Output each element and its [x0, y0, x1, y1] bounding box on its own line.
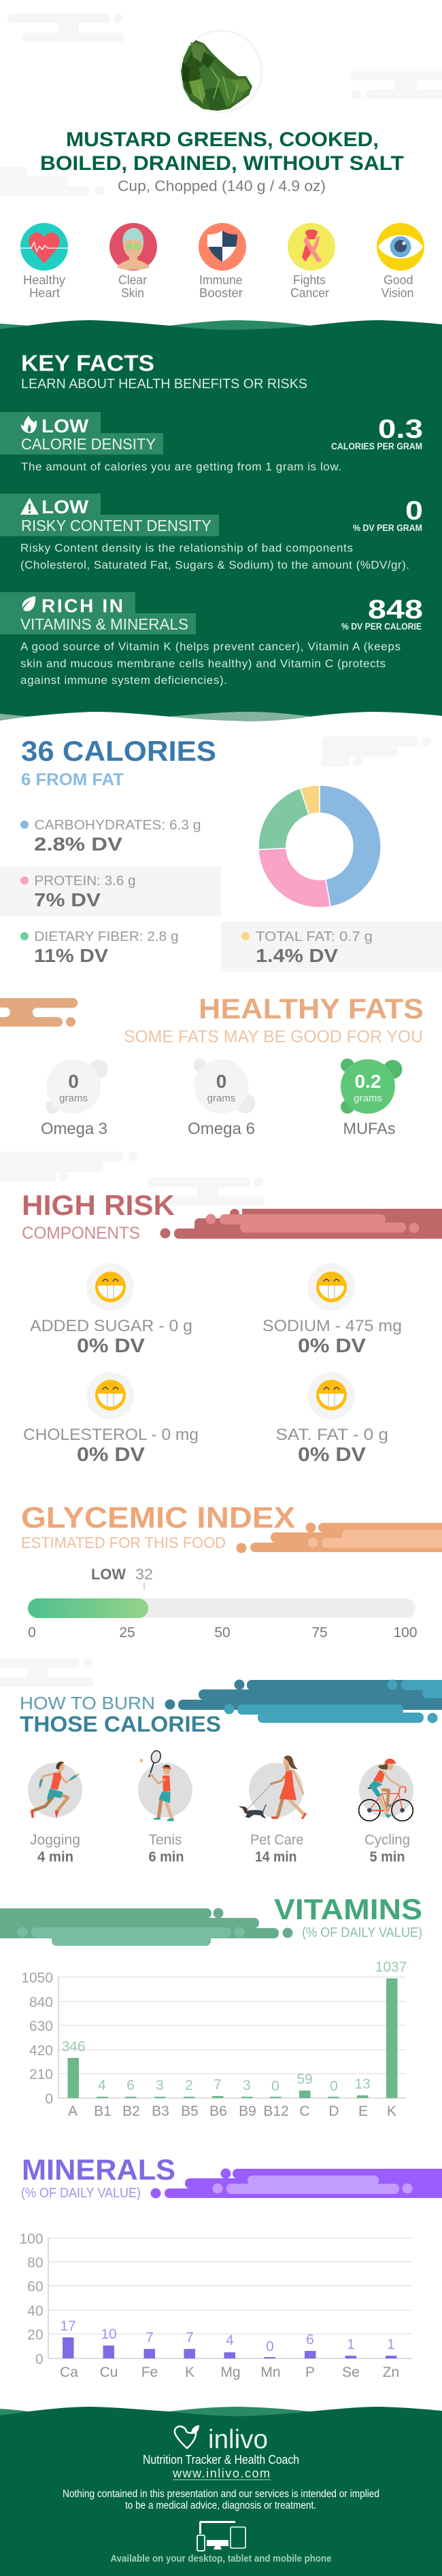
- healthy fats subheading: SOME FATS MAY BE GOOD FOR YOU: [124, 1027, 423, 1046]
- omega 6: [188, 1059, 256, 1138]
- bar chart: minerals: Zn: [383, 2365, 399, 2380]
- nutrient: carbohydrates: [20, 818, 201, 855]
- decorative band: [237, 1523, 442, 1553]
- bar chart: vitamins: 3: [156, 2078, 164, 2093]
- bar chart: minerals: Mg: [220, 2365, 241, 2380]
- bar chart: minerals: 10: [101, 2326, 117, 2342]
- bar chart: vitamins: 0: [330, 2078, 338, 2094]
- benefit labels: [23, 273, 413, 300]
- bar chart: minerals: 60: [27, 2279, 44, 2295]
- bar chart: vitamins: 346: [61, 2039, 86, 2055]
- activity: tennis: Tenis: [148, 1832, 182, 1848]
- component: cholesterol: 0% DV: [77, 1444, 146, 1466]
- key facts heading: KEY FACTS: [21, 351, 154, 375]
- bar chart: minerals: Fe: [141, 2365, 158, 2380]
- nutrient: dietary fiber: 11% DV: [34, 945, 108, 966]
- bar chart: vitamins: B2: [122, 2103, 140, 2119]
- nutrient: dietary fiber: [20, 929, 178, 966]
- gauge value: 32: [135, 1566, 153, 1583]
- bar chart: vitamins: 3: [243, 2078, 251, 2093]
- gauge axis: [28, 1625, 418, 1641]
- bar chart: vitamins: E: [358, 2103, 368, 2119]
- bar chart: minerals: Cu: [100, 2365, 118, 2380]
- activity: cycling: Cycling: [364, 1832, 410, 1848]
- bar chart: vitamins: K: [387, 2103, 396, 2119]
- omega 3: 0: [68, 1071, 79, 1092]
- omega 3: grams: [59, 1093, 88, 1104]
- fact: risky content density: % DV PER GRAM: [353, 523, 422, 533]
- mufas: MUFAs: [343, 1120, 396, 1138]
- logo: [175, 2425, 268, 2454]
- activity: pet care: Pet Care: [250, 1832, 303, 1848]
- minerals heading: MINERALS: [22, 2154, 175, 2186]
- bar chart: minerals: 1: [347, 2337, 355, 2352]
- component: cholesterol: CHOLESTEROL - 0 mg: [23, 1426, 199, 1444]
- vitamins heading: VITAMINS: [274, 1893, 422, 1926]
- logo: inlivo: [208, 2425, 268, 2454]
- omega 3: [41, 1059, 107, 1138]
- decorative band: [160, 1209, 442, 1239]
- title: MUSTARD GREENS, COOKED,: [66, 128, 379, 151]
- fact: rich in vitamins and minerals: against immune system deficiencies).: [20, 674, 227, 687]
- nutrient: protein: PROTEIN: 3.6 g: [34, 874, 136, 889]
- bar chart: vitamins: D: [328, 2103, 339, 2119]
- disclaimer: to be a medical advice, diagnosis or treatment.: [125, 2500, 316, 2511]
- disclaimer: [63, 2488, 379, 2511]
- bar chart: vitamins: 0: [271, 2078, 279, 2094]
- title: [40, 128, 404, 175]
- activity: tennis: [138, 1750, 192, 1865]
- bar chart: minerals: Mn: [260, 2365, 281, 2380]
- nutrient: total fat: TOTAL FAT: 0.7 g: [256, 929, 373, 944]
- serving size: Cup, Chopped (140 g / 4.9 oz): [118, 177, 326, 194]
- bar chart: vitamins: 210: [29, 2067, 53, 2082]
- bar chart: vitamins: C: [299, 2103, 310, 2119]
- bar chart: minerals: P: [305, 2365, 315, 2380]
- fact: calorie density: [0, 412, 423, 473]
- component: sodium: 0% DV: [298, 1335, 367, 1357]
- icon: fights cancer: [288, 223, 335, 271]
- disclaimer: Nothing contained in this presentation and our services is intended or implied: [63, 2488, 379, 2500]
- fact: risky content density: RISKY CONTENT DENSITY: [21, 517, 211, 534]
- omega 3: Omega 3: [41, 1120, 107, 1138]
- fact: risky content density: LOW: [41, 496, 89, 517]
- benefit labels: Healthy: [23, 273, 65, 287]
- bar chart: minerals: 4: [226, 2333, 234, 2348]
- nutrient: total fat: [241, 929, 373, 966]
- bar chart: minerals: 17: [60, 2318, 76, 2334]
- benefit labels: Cancer: [290, 286, 329, 300]
- panel: vitamins: [0, 1893, 422, 2119]
- bar chart: vitamins: 4: [98, 2078, 106, 2093]
- panel: how to burn: [20, 1679, 442, 1865]
- footer: [0, 2407, 442, 2576]
- minerals subheading: (% OF DAILY VALUE): [21, 2186, 141, 2201]
- fact: rich in vitamins and minerals: VITAMINS & MINERALS: [20, 615, 188, 633]
- component: added sugar: 0% DV: [77, 1335, 146, 1357]
- activity: pet care: 14 min: [255, 1849, 296, 1865]
- nutrient: total fat: 1.4% DV: [256, 945, 338, 966]
- bar chart: minerals: 40: [27, 2303, 44, 2319]
- fact: rich in vitamins and minerals: % DV PER CALORIE: [341, 621, 422, 632]
- component: sodium: SODIUM - 475 mg: [262, 1317, 402, 1335]
- bar chart: vitamins: B5: [181, 2103, 199, 2119]
- benefit labels: Clear: [118, 273, 147, 287]
- bar chart: vitamins: B12: [263, 2103, 289, 2119]
- bar chart: vitamins: B9: [239, 2103, 256, 2119]
- nutrient: protein: 7% DV: [34, 889, 101, 910]
- fact: risky content density: Risky Content density is the relationship of bad components: [20, 541, 353, 555]
- mufas: grams: [354, 1093, 382, 1104]
- bar chart: minerals: [19, 2231, 411, 2380]
- fact: calorie density: CALORIE DENSITY: [21, 435, 156, 453]
- panel: calories: [0, 735, 442, 972]
- benefit labels: Skin: [121, 286, 144, 300]
- bar chart: vitamins: 6: [126, 2078, 135, 2093]
- fact: rich in vitamins and minerals: RICH IN: [41, 596, 123, 616]
- tagline: Nutrition Tracker & Health Coach: [143, 2453, 299, 2467]
- healthy fats heading: HEALTHY FATS: [199, 993, 424, 1025]
- bar chart: vitamins: 420: [29, 2043, 53, 2059]
- title: BOILED, DRAINED, WITHOUT SALT: [40, 152, 404, 175]
- nutrient: carbohydrates: 2.8% DV: [34, 834, 122, 855]
- gauge value: [91, 1566, 153, 1590]
- fact: rich in vitamins and minerals: skin and mucous membrane cells healthy) and Vitamin C (protects: [20, 657, 386, 670]
- fact: risky content density: 0: [405, 496, 423, 526]
- bar chart: vitamins: [21, 1959, 407, 2119]
- panel: healthy fats: [0, 993, 424, 1138]
- background pattern: [0, 14, 442, 1687]
- fact: calorie density: 0.3: [378, 415, 423, 444]
- bar chart: minerals: Ca: [60, 2365, 78, 2380]
- component: sodium: [262, 1263, 402, 1357]
- benefit labels: Good: [384, 273, 413, 287]
- omega 6: Omega 6: [188, 1120, 255, 1138]
- icon: leaf: [22, 596, 35, 611]
- nutrient: protein: [20, 874, 136, 910]
- icon: healthy heart: [20, 223, 68, 271]
- benefit labels: Fights: [293, 273, 326, 287]
- icon: devices: [197, 2521, 245, 2551]
- bar chart: vitamins: B3: [152, 2103, 169, 2119]
- icon: warning: [20, 498, 39, 515]
- bar chart: vitamins: B1: [94, 2103, 112, 2119]
- bar chart: minerals: 0: [35, 2352, 44, 2367]
- activity: pet care: [239, 1755, 307, 1865]
- omega 6: 0: [216, 1071, 226, 1092]
- mufas: [341, 1059, 403, 1138]
- omega 6: grams: [207, 1093, 235, 1104]
- website: www.inlivo.com: [172, 2467, 270, 2480]
- bar chart: vitamins: 13: [354, 2076, 371, 2092]
- fact: risky content density: [0, 494, 423, 571]
- component: saturated fat: 0% DV: [298, 1444, 367, 1466]
- high risk subheading: COMPONENTS: [22, 1224, 140, 1243]
- bar chart: minerals: 7: [146, 2330, 154, 2346]
- panel: how to burn: THOSE CALORIES: [20, 1712, 221, 1736]
- panel: high risk components: [22, 1189, 442, 1466]
- component: cholesterol: [23, 1372, 199, 1466]
- fact: calorie density: LOW: [41, 415, 89, 436]
- bar chart: vitamins: 7: [214, 2077, 222, 2093]
- activity: tennis: 6 min: [148, 1849, 184, 1865]
- mufas: 0.2: [355, 1071, 381, 1092]
- bar chart: vitamins: 2: [185, 2078, 193, 2093]
- benefit labels: Heart: [29, 286, 60, 300]
- bar chart: minerals: Se: [342, 2365, 360, 2380]
- icon: flame: [21, 415, 37, 433]
- nutrient: carbohydrates: CARBOHYDRATES: 6.3 g: [34, 818, 201, 833]
- calories from fat: 6 FROM FAT: [21, 770, 124, 789]
- donut chart: [258, 785, 381, 908]
- bar chart: vitamins: 840: [29, 1995, 53, 2010]
- gauge axis: 100: [393, 1625, 418, 1641]
- calories heading: 36 CALORIES: [21, 735, 216, 767]
- fact: risky content density: (Cholesterol, Saturated Fat, Sugars & Sodium) to the amount (%DV/gr).: [20, 559, 409, 571]
- bar chart: minerals: K: [185, 2365, 194, 2380]
- activity: cycling: [359, 1759, 413, 1865]
- decorative band: [165, 1679, 442, 1723]
- fact: rich in vitamins and minerals: 848: [368, 596, 423, 624]
- activity: jogging: 4 min: [37, 1849, 73, 1865]
- bar chart: vitamins: A: [68, 2103, 78, 2119]
- gauge axis: 25: [119, 1625, 135, 1641]
- fact: rich in vitamins and minerals: [0, 592, 423, 687]
- bar chart: vitamins: 0: [45, 2091, 53, 2107]
- panel: glycemic index: [21, 1501, 442, 1641]
- bar chart: minerals: 100: [19, 2231, 44, 2247]
- benefit labels: Vision: [381, 286, 413, 300]
- bar chart: vitamins: 630: [29, 2019, 53, 2034]
- activity: jogging: [28, 1762, 82, 1865]
- panel: key facts: [0, 320, 442, 721]
- nutrient: dietary fiber: DIETARY FIBER: 2.8 g: [34, 929, 178, 944]
- icon: good vision: [377, 223, 424, 271]
- activity: jogging: Jogging: [30, 1832, 80, 1848]
- bar chart: minerals: 0: [266, 2339, 274, 2354]
- glycemic heading: GLYCEMIC INDEX: [21, 1501, 295, 1534]
- bar chart: minerals: 1: [387, 2337, 395, 2352]
- bar chart: vitamins: 59: [296, 2072, 313, 2087]
- key facts subheading: LEARN ABOUT HEALTH BENEFITS OR RISKS: [21, 377, 307, 392]
- component: saturated fat: SAT. FAT - 0 g: [276, 1426, 388, 1444]
- gauge value: LOW: [91, 1566, 126, 1583]
- benefits row: [20, 223, 424, 300]
- gauge axis: 0: [28, 1625, 36, 1641]
- bar chart: minerals: 20: [27, 2327, 44, 2343]
- panel: minerals: [19, 2154, 442, 2380]
- icon: clear skin: [109, 223, 157, 271]
- decorative band: [151, 2169, 442, 2199]
- vitamins subheading: (% OF DAILY VALUE): [302, 1925, 422, 1940]
- food photo: mustard greens: [180, 31, 262, 112]
- availability note: Available on your desktop, tablet and mobile phone: [110, 2553, 332, 2564]
- component: saturated fat: [276, 1372, 388, 1466]
- fact: calorie density: CALORIES PER GRAM: [331, 441, 422, 451]
- fact: calorie density: The amount of calories you are getting from 1 gram is low.: [21, 460, 341, 473]
- bar chart: vitamins: 1037: [375, 1959, 407, 1975]
- benefit labels: Booster: [199, 286, 243, 300]
- component: added sugar: [30, 1263, 192, 1357]
- gauge axis: 75: [311, 1625, 328, 1641]
- gauge bar: [28, 1598, 415, 1618]
- decorative band: [0, 998, 78, 1027]
- burn heading: HOW TO BURN: [20, 1693, 155, 1713]
- benefit labels: Immune: [199, 273, 242, 287]
- bar chart: minerals: 7: [186, 2330, 194, 2346]
- fact: rich in vitamins and minerals: A good source of Vitamin K (helps prevent cancer), Vitamin A (keeps: [20, 640, 401, 653]
- bar chart: vitamins: B6: [209, 2103, 227, 2119]
- icon: immune booster: [199, 223, 246, 271]
- activity: cycling: 5 min: [370, 1849, 405, 1865]
- high risk heading: HIGH RISK: [22, 1189, 175, 1221]
- glycemic subheading: ESTIMATED FOR THIS FOOD: [21, 1534, 226, 1551]
- bar chart: vitamins: 1050: [21, 1970, 53, 1986]
- bar chart: minerals: 80: [27, 2255, 44, 2271]
- bar chart: minerals: 6: [306, 2332, 314, 2348]
- decorative band: [0, 1908, 292, 1946]
- gauge axis: 50: [214, 1625, 231, 1641]
- component: added sugar: ADDED SUGAR - 0 g: [30, 1317, 192, 1335]
